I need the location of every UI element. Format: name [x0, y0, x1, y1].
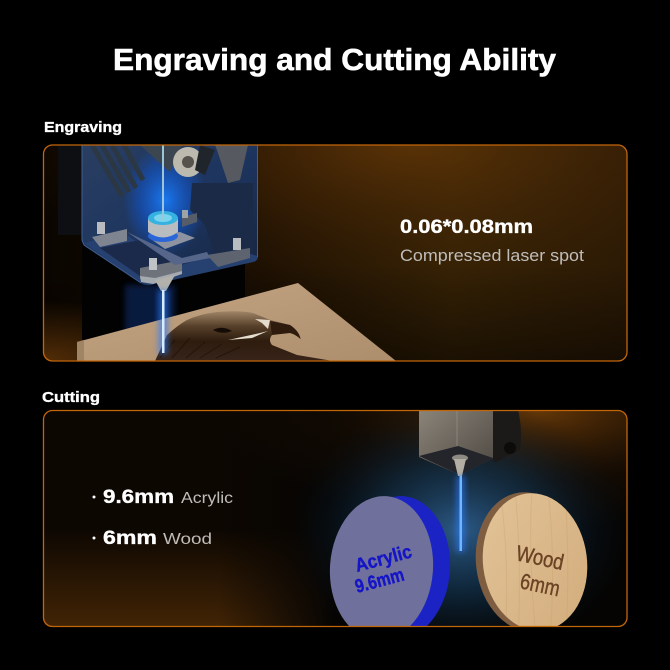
text: acrylic spec: Acrylic — [181, 490, 233, 507]
acrylic label: Acrylic — [353, 541, 415, 577]
text: wood spec: Wood — [163, 531, 212, 548]
floor of the housing — [84, 233, 258, 285]
metal frame — [92, 229, 127, 247]
wood label: Wood — [514, 540, 566, 575]
lens mount — [148, 232, 195, 249]
text: laser spot: 0.06*0.08mm — [400, 217, 533, 238]
machine column — [58, 145, 245, 340]
eagle engraving — [155, 311, 333, 361]
heading: engraving: Engraving — [44, 120, 122, 136]
laser beam — [158, 290, 168, 354]
acrylic label: 9.6mm — [353, 565, 407, 598]
icon: cutting laser head — [419, 410, 521, 476]
wood disc — [476, 492, 588, 626]
wood label: 6mm — [518, 568, 562, 601]
heading: cutting: Cutting — [42, 390, 100, 406]
text: wood spec — [92, 528, 212, 549]
text: acrylic spec — [92, 487, 233, 508]
icon: laser head housing — [82, 145, 258, 291]
laser beam — [456, 476, 465, 552]
title: Engraving and Cutting Ability — [113, 42, 557, 77]
wood label — [518, 545, 564, 596]
text: laser spot — [400, 217, 584, 265]
panel: engraving — [43, 145, 627, 361]
acrylic disc — [330, 496, 450, 626]
panel: cutting — [42, 410, 628, 628]
screws — [97, 222, 105, 234]
text: wood spec: 6mm — [103, 528, 157, 549]
text: acrylic spec: 9.6mm — [103, 487, 174, 508]
text: laser spot: Compressed laser spot — [400, 247, 584, 265]
acrylic label — [354, 546, 412, 592]
wood block — [77, 283, 396, 361]
